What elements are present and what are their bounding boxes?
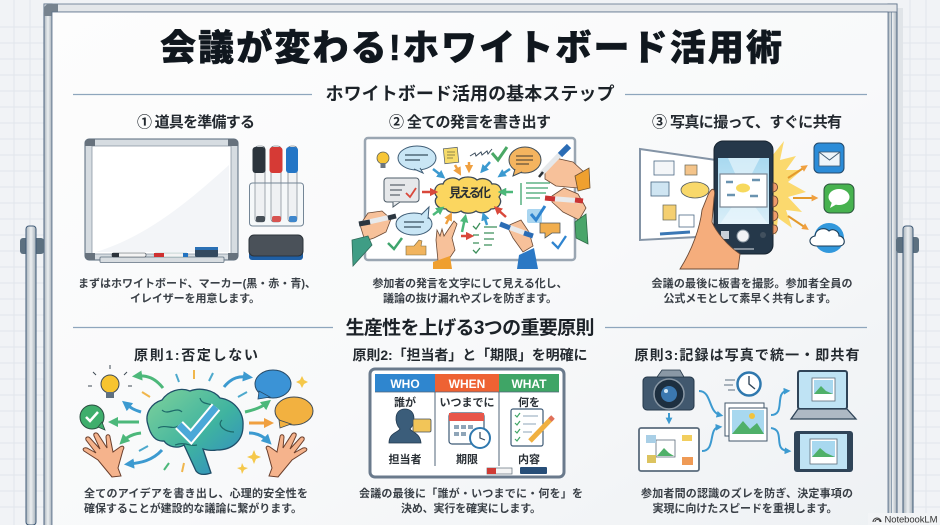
step 2 description: 参加者の発言を文字にして見える化し、 xyxy=(372,276,568,290)
flow arrows xyxy=(669,391,788,451)
WHAT column: 何を xyxy=(518,395,540,409)
icon: eraser xyxy=(249,235,303,260)
WHO column xyxy=(375,374,435,466)
principle 3 description: 参加者間の認識のズレを防ぎ、決定事項の xyxy=(641,486,853,500)
icon: orange speech bubble xyxy=(275,397,313,428)
icon: whiteboard with tray xyxy=(85,139,238,262)
principle 3 description: 実現に向けたスピードを重視します。 xyxy=(652,501,838,515)
step 1 description xyxy=(78,276,316,305)
hand: top right xyxy=(539,146,590,191)
icon: small whiteboard xyxy=(639,428,699,471)
icon: starburst xyxy=(770,141,806,235)
hand: left with dark marker xyxy=(352,211,396,266)
WHO column: 誰が xyxy=(394,395,416,409)
section heading: principles: 生産性を上げる3つの重要原則 xyxy=(346,317,594,339)
scribble xyxy=(470,149,492,156)
principle 3 description xyxy=(641,486,853,515)
bottom checklist xyxy=(473,223,497,253)
arrows pointing to cloud xyxy=(422,162,513,236)
icon: light bulb xyxy=(377,152,389,168)
icon: message xyxy=(824,184,854,213)
icon: cloud xyxy=(810,223,844,253)
WHO column: 担当者 xyxy=(388,452,422,466)
icon: brain with check xyxy=(147,389,243,474)
principle 1 description xyxy=(84,486,308,515)
principle 1 heading: 原則1:否定しない xyxy=(134,347,258,363)
hand: right with red marker xyxy=(545,188,588,244)
step 2 description xyxy=(372,276,568,305)
panel: principle 1 xyxy=(80,347,313,515)
WHEN column: いつまでに xyxy=(440,396,494,409)
principle 2 description: 会議の最後に「誰が・いつまでに・何を」を xyxy=(359,486,583,500)
icon: brainstorm board xyxy=(352,138,590,269)
WHEN column: WHEN xyxy=(449,377,485,391)
icon: laptop xyxy=(791,371,856,419)
icon: check bubble xyxy=(80,405,105,430)
principle 3 heading: 原則3:記録は写真で統一・即共有 xyxy=(634,347,860,363)
speech bubble top xyxy=(398,146,436,173)
principle 2 description xyxy=(359,486,583,515)
step 1 description: まずはホワイトボード、マーカー(黒・赤・青)、 xyxy=(78,276,316,290)
list on right xyxy=(521,183,550,205)
step 3 description xyxy=(652,276,852,305)
central cloud: 見える化 xyxy=(449,186,491,200)
blue check square xyxy=(527,206,545,223)
sticky note xyxy=(443,147,459,164)
WHAT column: WHAT xyxy=(511,377,547,391)
green check xyxy=(492,147,507,160)
arrows to apps xyxy=(788,167,815,228)
orange notes xyxy=(540,223,560,238)
panel: step 1 xyxy=(78,113,316,305)
blue speech bubble bottom xyxy=(396,207,432,235)
whiteboard stand left xyxy=(20,226,44,525)
principle 2 heading: 原則2:「担当者」と「期限」を明確に xyxy=(352,347,588,363)
orange speech bubble xyxy=(509,147,541,176)
icon: clock xyxy=(724,372,760,396)
icon: light bulb xyxy=(88,365,132,398)
arrows around brain xyxy=(113,376,269,464)
step 1 description: イレイザーを用意します。 xyxy=(130,292,260,305)
principle 2 description: 決め、実行を確実にします。 xyxy=(401,501,541,515)
step 3 heading: ③ 写真に撮って、すぐに共有 xyxy=(652,113,842,131)
step 3 description: 会議の最後に板書を撮影。参加者全員の xyxy=(652,276,852,290)
icon: back whiteboard xyxy=(640,149,716,240)
WHO column: WHO xyxy=(390,377,420,391)
icon: smartphone xyxy=(714,141,773,254)
icon: left hand xyxy=(83,433,124,477)
panel: principle 3 xyxy=(634,347,860,515)
icon: markers in holder xyxy=(250,146,304,226)
panel: step 2 xyxy=(352,113,590,305)
title: 会議が変わる!ホワイトボード活用術 xyxy=(160,27,782,68)
step 1 heading: ① 道具を準備する xyxy=(137,113,255,131)
WHAT column: 内容 xyxy=(518,452,540,466)
icon: blue speech bubble xyxy=(255,370,291,399)
WHEN column: 期限 xyxy=(456,452,478,466)
gray speech bubble xyxy=(384,178,419,207)
hand: bottom right with blue marker xyxy=(500,220,538,269)
icon: stacked photos xyxy=(725,403,767,441)
whiteboard stand right xyxy=(896,226,919,525)
icon: right hand xyxy=(266,433,307,477)
WHAT column xyxy=(499,374,559,466)
icon: mail xyxy=(814,143,844,173)
panel: principle 2 xyxy=(352,347,588,515)
section heading: basic steps: ホワイトボード活用の基本ステップ xyxy=(326,84,614,104)
step 3 description: 公式メモとして素早く共有します。 xyxy=(664,291,836,305)
bottom left checks xyxy=(388,238,426,255)
fingers xyxy=(773,183,778,234)
step 2 description: 議論の抜け漏れやズレを防ぎます。 xyxy=(383,291,557,305)
principle 1 description: 確保することが建設的な議論に繋がります。 xyxy=(84,501,302,515)
icon: tablet xyxy=(794,431,853,472)
decorative ticks and sparkles xyxy=(139,370,308,474)
whiteboard table xyxy=(370,369,564,477)
icon: camera xyxy=(643,370,694,410)
hand: bottom center xyxy=(433,221,457,269)
central cloud xyxy=(435,177,501,213)
WHEN column xyxy=(435,374,499,466)
principle 1 description: 全てのアイデアを書き出し、心理的安全性を xyxy=(84,486,308,500)
watermark: NotebookLM xyxy=(868,513,940,525)
icon: hand holding phone xyxy=(680,189,740,269)
step 2 heading: ② 全ての発言を書き出す xyxy=(389,113,551,131)
bottom right check xyxy=(552,236,566,248)
panel: step 3 xyxy=(640,113,854,305)
